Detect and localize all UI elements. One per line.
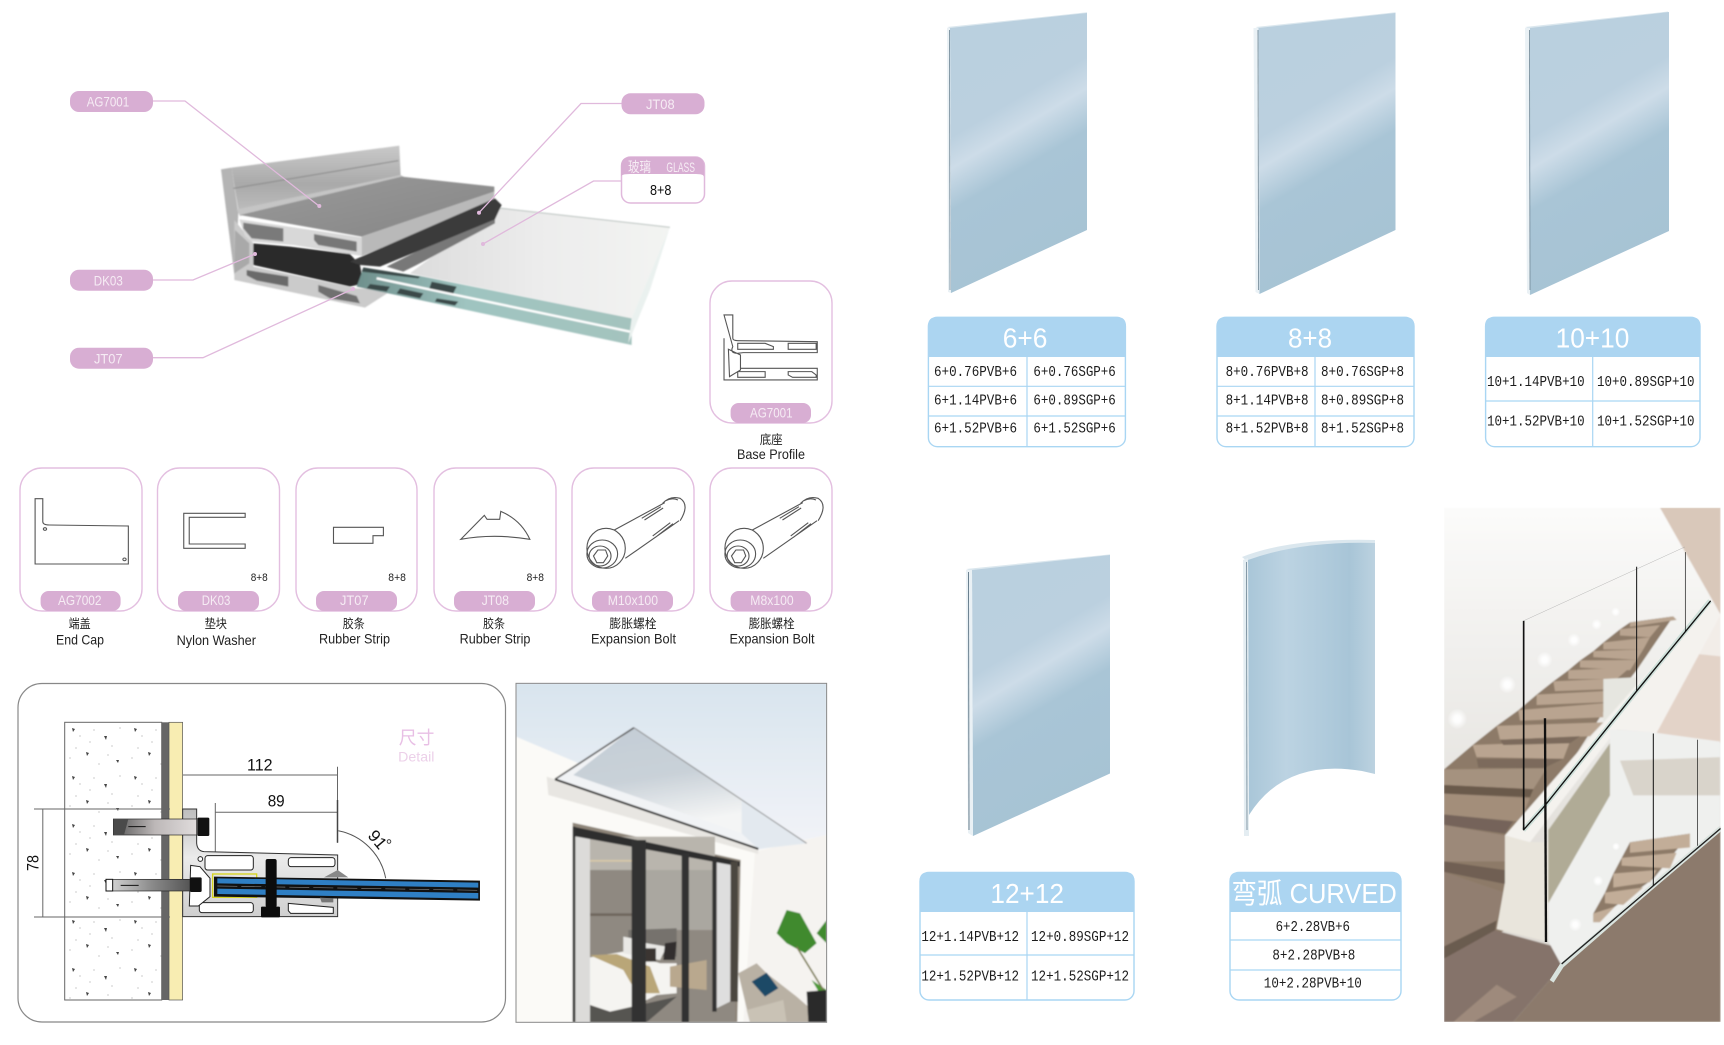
caption: expansion bolt M8	[730, 616, 815, 646]
spec table: 10+10: 10+1.14PVB+10	[1487, 374, 1585, 391]
callout: AG7001	[70, 91, 321, 208]
caption: base profile: 底座	[760, 432, 783, 447]
caption: rubber strip JT08	[460, 616, 531, 646]
caption: rubber strip JT07: 胶条	[343, 616, 365, 631]
caption: end cap: 端盖	[69, 617, 91, 631]
spec table: 8+8: 8+8	[1288, 322, 1332, 354]
spec table: curved: 8+2.28PVB+8	[1272, 948, 1355, 964]
photo: glass canopy over sliding door	[516, 683, 827, 1022]
callout: JT08	[477, 93, 704, 215]
spec table: 8+8: 8+1.14PVB+8	[1226, 393, 1309, 410]
spec table: 10+10: 10+0.89SGP+10	[1597, 374, 1694, 391]
callout: AG7001: AG7001	[87, 94, 129, 110]
callout: JT07	[70, 287, 355, 369]
part card: JT07 rubber strip: 8+8	[388, 572, 406, 584]
caption: expansion bolt M10: Expansion Bolt	[591, 630, 676, 646]
spec table: 12+12: 12+1.52SGP+12	[1031, 968, 1129, 986]
part card: JT08 rubber strip	[434, 468, 556, 611]
part card: JT08 rubber strip: 8+8	[527, 572, 544, 584]
spec table: 6+6: 6+1.14PVB+6	[934, 393, 1017, 410]
callout: glass 8+8: 玻璃	[628, 159, 651, 175]
spec table: 10+10: 10+1.52PVB+10	[1487, 414, 1585, 431]
caption: nylon washer	[177, 616, 256, 648]
caption: end cap: End Cap	[56, 632, 104, 648]
part card: M10x100 expansion bolt	[572, 468, 694, 611]
part card: DK03 nylon washer: DK03	[202, 592, 231, 608]
dimension value: 112: 112	[247, 756, 273, 774]
part card: DK03 nylon washer: 8+8	[251, 572, 268, 584]
part card: M8x100 expansion bolt: M8x100	[750, 592, 794, 608]
dimension value: 91 degrees: 91	[364, 826, 391, 853]
aluminium profile, glass and bolts section	[106, 809, 480, 917]
caption: end cap	[56, 617, 104, 648]
caption: rubber strip JT08: 胶条	[483, 616, 505, 631]
spec table: curved: 10+2.28PVB+10	[1264, 976, 1362, 992]
callout: DK03	[70, 252, 257, 291]
part card: M10x100 expansion bolt: M10x100	[608, 592, 658, 608]
caption: expansion bolt M10	[591, 616, 676, 646]
part card: JT08 rubber strip: JT08	[482, 592, 509, 608]
spec table: 6+6: 6+1.52SGP+6	[1033, 421, 1116, 438]
spec table: 8+8: 8+1.52SGP+8	[1321, 421, 1404, 438]
spec table: 8+8: 8+1.52PVB+8	[1226, 421, 1309, 438]
callout: DK03: DK03	[94, 272, 123, 288]
part card: AG7002 end cap: AG7002	[58, 592, 102, 608]
dimension value: 78: 78	[24, 855, 42, 871]
dimension lines	[34, 767, 386, 917]
caption: expansion bolt M8: 膨胀螺栓	[749, 616, 795, 631]
spec table: 12+12: 12+1.14PVB+12	[921, 929, 1019, 946]
callout: glass 8+8: GLASS	[666, 159, 695, 175]
concrete wall section	[65, 722, 162, 1000]
panel: dimension detail drawing	[18, 684, 506, 1022]
detail heading: Detail	[398, 749, 434, 765]
callout: glass 8+8	[481, 157, 704, 246]
spec table: 8+8: 8+0.89SGP+8	[1321, 393, 1404, 410]
spec table: 6+6: 6+1.52PVB+6	[934, 421, 1017, 438]
caption: base profile	[737, 432, 805, 462]
part card: AG7001 base profile: AG7001	[750, 405, 793, 421]
part card: M8x100 expansion bolt	[710, 468, 832, 611]
spec table: 12+12: 12+1.52PVB+12	[921, 968, 1019, 986]
callout: glass 8+8: 8+8	[650, 182, 671, 199]
spec table: 8+8: 8+0.76PVB+8	[1226, 364, 1309, 381]
part card: DK03 nylon washer	[158, 468, 280, 611]
caption: rubber strip JT08: Rubber Strip	[460, 630, 531, 646]
spec table: 10+10: 10+1.52SGP+10	[1597, 414, 1694, 431]
glass panel: 12+12	[966, 554, 1110, 836]
caption: rubber strip JT07: Rubber Strip	[319, 630, 390, 646]
glass panel: curved	[1242, 540, 1375, 836]
spec table: 6+6: 6+0.76PVB+6	[934, 364, 1017, 381]
glass panel: 6+6	[947, 12, 1087, 293]
caption: expansion bolt M10: 膨胀螺栓	[609, 616, 657, 631]
spec table: 6+6	[928, 317, 1126, 447]
spec table: 12+12: 12+0.89SGP+12	[1031, 929, 1129, 946]
part card: JT07 rubber strip	[296, 468, 417, 611]
caption: base profile: Base Profile	[737, 446, 805, 462]
callout: JT07: JT07	[94, 350, 123, 366]
detail heading: 尺寸	[399, 728, 434, 748]
spec table: 10+10	[1485, 317, 1700, 447]
spec table: curved: 6+2.28VB+6	[1276, 919, 1350, 936]
caption: rubber strip JT07	[319, 616, 390, 646]
spec table: 12+12	[920, 872, 1134, 1000]
spec table: curved: 弯弧 CURVED	[1232, 878, 1397, 909]
dimension value: 89: 89	[268, 792, 285, 811]
detail heading	[398, 728, 434, 765]
caption: nylon washer: Nylon Washer	[177, 632, 256, 648]
caption: expansion bolt M8: Expansion Bolt	[730, 630, 815, 646]
spec table: 6+6: 6+6	[1003, 322, 1047, 354]
part card: AG7001 base profile	[710, 281, 832, 423]
spec table: 6+6: 6+0.76SGP+6	[1033, 364, 1116, 381]
wall cladding layers	[162, 722, 183, 1000]
photo: glass staircase balustrade	[1444, 508, 1721, 1022]
spec table: curved	[1230, 872, 1402, 1000]
part card: JT07 rubber strip: JT07	[340, 592, 369, 608]
3D profile model: glass clamp cutaway	[221, 146, 670, 345]
room interior seen through door	[592, 871, 734, 1020]
part card: AG7002 end cap	[20, 468, 142, 611]
spec table: 8+8	[1216, 317, 1414, 447]
caption: nylon washer: 垫块	[205, 616, 227, 631]
spec table: 8+8: 8+0.76SGP+8	[1321, 364, 1404, 381]
glass panel: 8+8	[1254, 12, 1396, 294]
spec table: 6+6: 6+0.89SGP+6	[1033, 393, 1116, 410]
degree mark	[387, 840, 391, 843]
spec table: 10+10: 10+10	[1556, 322, 1629, 354]
spec table: 12+12: 12+12	[990, 878, 1064, 909]
callout: JT08: JT08	[646, 96, 675, 112]
glass panel: 10+10	[1525, 12, 1669, 295]
